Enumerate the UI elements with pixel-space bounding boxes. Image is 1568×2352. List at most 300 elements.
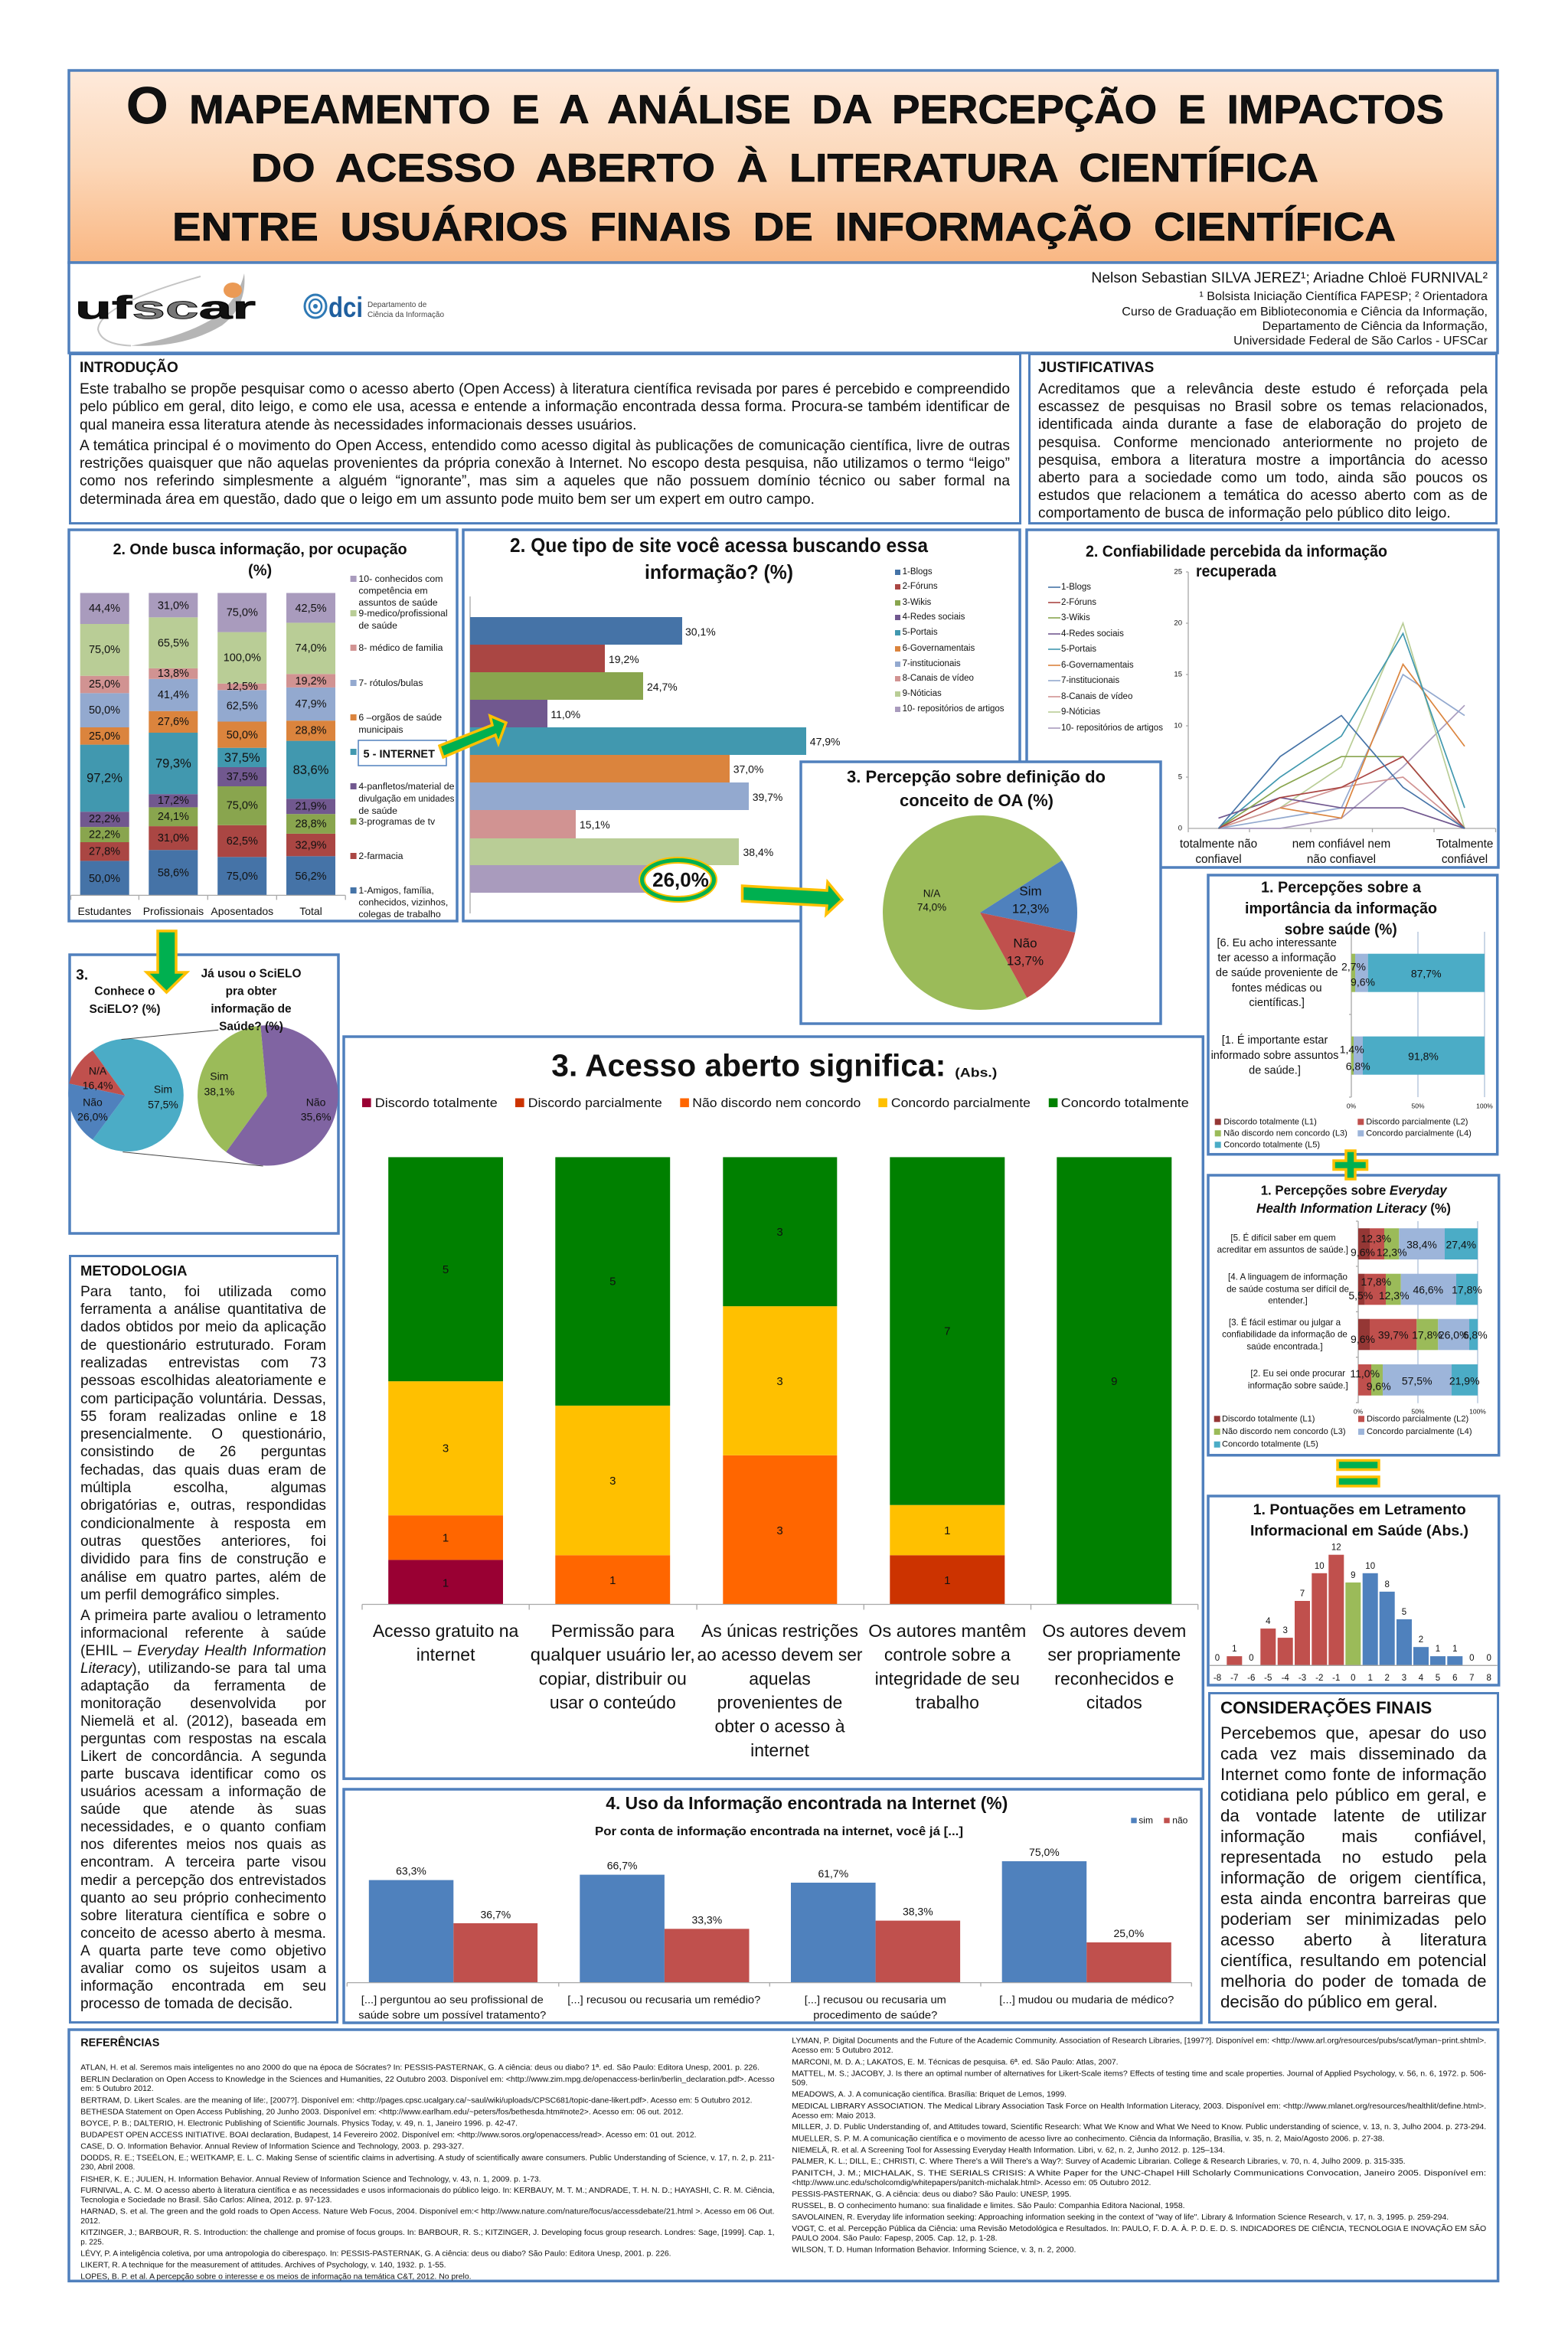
bar value labels: 12,5% [227, 681, 258, 693]
legend: Concordo parcialmente [891, 1095, 1031, 1109]
bar value labels: 37,5% [227, 771, 258, 783]
bar value labels: 28,8% [295, 818, 327, 830]
text block: introdução: determinada área em questão, dado que o leigo em um assunto pode muito bem ser um expert em outro campo. [80, 492, 815, 508]
bar value labels: 31,0% [158, 599, 189, 612]
references: right column [792, 2037, 1487, 2254]
references: left column: KITZINGER, J.; BARBOUR, R. S. Introduction: the challenge and promise of focus groups. In: BARBOUR, R. S.; KITZINGER, J. Developing focus group research. Londres: Sage, [1999]. Cap. 1, [81, 2229, 775, 2237]
text block: considerações finais: representada no estudo pela [1220, 1847, 1487, 1867]
legend: 10- repositórios de artigos [903, 704, 1004, 714]
legend: Concordo parcialmente (L4) [1367, 1427, 1472, 1436]
text block: metodologia: Likert de concordância. A segunda [80, 1749, 326, 1765]
bar value labels: 47,9% [295, 698, 327, 710]
stacked bar chart [1348, 1221, 1488, 1416]
logo: UFSCar [75, 273, 256, 346]
statement labels: acreditar em assuntos de saúde.] [1217, 1245, 1348, 1255]
text block: metodologia: conceito de acesso aberto à mesma. [80, 1926, 326, 1942]
histogram: -2 [1315, 1674, 1323, 1683]
pie chart: 74,0% [917, 902, 946, 913]
heading: já usou o SciELO [201, 967, 301, 1033]
text block: metodologia: processo de tomada de decisão. [80, 1996, 292, 2012]
bar value labels: 41,4% [158, 689, 189, 701]
line chart: 20 [1174, 619, 1182, 628]
text block: metodologia: Literacy), utilizando-se para tal uma [80, 1661, 326, 1677]
text block: metodologia: análise em quatro partes, além de [80, 1570, 326, 1586]
bar value labels: 50,0% [89, 873, 120, 885]
callout: 26,0% highlight [642, 861, 714, 899]
stacked bar chart: 12,3% [1379, 1289, 1410, 1302]
stacked bar chart: 1 [443, 1576, 449, 1589]
chart title [1086, 543, 1387, 580]
pie chart: Sim [1019, 884, 1042, 899]
authors [1091, 270, 1488, 348]
text block: metodologia: um perfil demográfico simples. [80, 1587, 279, 1603]
text block: metodologia: quanto ao seu próprio conhecimento [80, 1890, 326, 1906]
text block: considerações finais: decisão do público em geral. [1220, 1992, 1438, 2011]
pie: conhece o SciELO: 57,5% [148, 1098, 178, 1110]
panel: percepção sobre definição de OA [799, 760, 1162, 1025]
legend: municipais [358, 724, 403, 735]
category labels: [...] mudou ou mudaria de médico? [999, 1993, 1174, 2005]
legend: 6-Governamentais [1061, 661, 1134, 670]
text block: justificativas: escassez de pesquisas no Brasil sobre os temas relacionados, [1038, 399, 1488, 415]
legend: 7-institucionais [903, 659, 961, 668]
legend [1048, 583, 1163, 733]
chart title [113, 541, 407, 579]
panel: referências [67, 2028, 1499, 2283]
connector lines between pies [121, 1030, 263, 1166]
histogram: -7 [1230, 1674, 1238, 1683]
text block: metodologia: A quarta parte teve como objetivo [80, 1943, 326, 1959]
histogram: 3 [1402, 1674, 1406, 1683]
line chart: totalmente não [1180, 838, 1257, 851]
pie: já usou o SciELO: Não [305, 1096, 325, 1108]
authors: ¹ Bolsista Iniciação Científica FAPESP; ² Orientadora [1199, 289, 1488, 303]
stacked bar chart: 3 [776, 1225, 782, 1238]
category labels: [...] recusou ou recusaria um remédio? [567, 1993, 760, 2005]
callout: 5 - internet [358, 740, 446, 766]
legend: 3-Wikis [903, 598, 932, 607]
text block: considerações finais: da vontade latente de utilizar [1220, 1806, 1487, 1825]
horizontal bar chart: 19,2% [609, 653, 639, 665]
bar chart: 91,8% [1408, 1050, 1439, 1062]
line chart: não confiavel [1307, 853, 1376, 866]
chart title [847, 767, 1106, 810]
text block: considerações finais: poderiam ser minimizadas pelo [1220, 1909, 1487, 1929]
horizontal bar chart: 11,0% [550, 708, 580, 720]
legend: 2-Fóruns [903, 582, 938, 591]
horizontal bar chart: 37,0% [733, 763, 763, 776]
statement labels: [6. Eu acho interessante [1217, 937, 1337, 949]
bar value labels: 19,2% [295, 675, 327, 688]
panel: SciELO pies [68, 953, 340, 1235]
heading: 3.: 3. [76, 967, 88, 983]
category labels: aquelas [749, 1668, 810, 1688]
stacked bar chart: 50% [1411, 1408, 1425, 1416]
text block: considerações finais [1220, 1723, 1487, 2011]
bar value labels: 74,0% [295, 642, 327, 655]
line chart: 10 [1174, 721, 1182, 730]
text block: metodologia: múltipla escolha, algumas [80, 1480, 326, 1496]
stacked bar chart: 1 [609, 1573, 616, 1586]
legend: 4-Redes sociais [903, 612, 965, 622]
logo: DCI: dci [328, 292, 363, 323]
legend [1214, 1414, 1472, 1449]
bar value labels: 17,2% [158, 795, 189, 807]
legend: 8-Canais de vídeo [1061, 692, 1132, 701]
text block: metodologia: monitoração desenvolvida por [80, 1696, 326, 1712]
stacked bar chart: 12,3% [1361, 1232, 1391, 1244]
bar value labels: 83,6% [293, 763, 329, 777]
bar value labels: 50,0% [227, 729, 258, 741]
references: right column: PAULO 2004. São Paulo: Fapesp, 2005. Cap. 12, p. 1-28. [792, 2234, 998, 2243]
chart title: conceito de OA (%) [900, 791, 1054, 810]
category labels: As únicas restrições [701, 1620, 858, 1640]
legend: 4-Redes sociais [1061, 629, 1124, 639]
legend [895, 567, 1004, 714]
histogram: -6 [1247, 1674, 1255, 1683]
panel: que tipo de site [462, 528, 1021, 923]
authors: Nelson Sebastian SILVA JEREZ¹; Ariadne Chloë FURNIVAL² [1091, 270, 1488, 286]
grouped bar chart [347, 1845, 1191, 1986]
legend [362, 1095, 1188, 1109]
bar chart: 87,7% [1411, 967, 1442, 979]
statement labels: informado sobre assuntos [1211, 1050, 1338, 1062]
heading: conhece o SciELO: SciELO? (%) [89, 1003, 160, 1016]
bar value labels: 65,5% [158, 637, 189, 649]
histogram: 4 [1266, 1617, 1271, 1626]
category labels [373, 1620, 1186, 1759]
chart title: 2. Confiabilidade percebida da informação [1086, 543, 1387, 560]
stacked bar chart: 3 [776, 1524, 782, 1537]
category labels: internet [750, 1740, 809, 1759]
bar value labels: 56,2% [295, 871, 327, 883]
text block: metodologia: encontram. A terceira parte visou [80, 1854, 326, 1870]
stacked bar chart: 3 [776, 1375, 782, 1387]
heading: conhece o SciELO [89, 985, 160, 1016]
references: left column: 2012. [81, 2217, 100, 2226]
references: left column: Tecnologia e Sociedade no Brasil. São Carlos: Alínea, 2012. p. 97-123. [81, 2196, 332, 2204]
text block: metodologia: consistindo de 26 perguntas [80, 1444, 326, 1460]
legend: 9-Nóticias [1061, 707, 1100, 717]
stacked bar chart: 17,8% [1452, 1284, 1482, 1296]
text block: considerações finais: Percebemos que, apesar do uso [1220, 1723, 1487, 1743]
text block: metodologia: usuários acessam a informação de [80, 1784, 326, 1800]
references: right column: MARCONI, M. D. A.; LAKATOS, E. M. Técnicas de pesquisa. 6ª. ed. São Paulo: Atlas, 2007. [792, 2058, 1119, 2066]
text block: considerações finais: científica, resultando em potencial [1220, 1951, 1487, 1970]
panel: pontuações em letramento informacional [1207, 1494, 1501, 1687]
legend: 5-Portais [903, 628, 938, 637]
legend: Discordo parcialmente (L2) [1367, 1414, 1468, 1423]
category labels: controle sobre a [884, 1645, 1011, 1664]
heading: referências: REFERÊNCIAS [81, 2035, 160, 2049]
references: left column [81, 2063, 775, 2281]
category labels: integridade de seu [874, 1668, 1020, 1688]
bar chart: 1,4% [1340, 1043, 1364, 1055]
histogram: 8 [1486, 1674, 1491, 1683]
histogram: 0 [1469, 1654, 1475, 1663]
panel: metodologia [69, 1255, 338, 2024]
chart title: 3. Percepção sobre definição do [847, 767, 1106, 786]
horizontal bar chart: 15,1% [580, 818, 610, 831]
heading: metodologia: METODOLOGIA [80, 1263, 187, 1279]
legend: Não discordo nem concordo [692, 1095, 861, 1109]
callout: 26,0% highlight: 26,0% [652, 868, 709, 891]
references: right column: MILLER, J. D. Public Understanding of, and Attitudes toward, Scientific Research: What We Know and What We Need to Know. Public understanding of science, v. 13, n. 3, Julho 2004. p. 273-294. [792, 2123, 1487, 2132]
references: left column: DODDS, R. E.; TSEËLON, E.; WEITKAMP, E. L. C. Making Sense of scientific claims in advertising. A study of scientifically aware consumers. Public Understanding of Science, v. 17, n. 2, p. 211- [81, 2153, 775, 2162]
text block: metodologia: 55 foram realizadas online e 18 [80, 1409, 326, 1425]
references: left column: BERTRAM, D. Likert Scales. are the meaning of life:, [2007?]. Disponível em: <http://pages.cpsc.ucalgary.ca/~saul/wiki/uploads/CPSC681/topic-dane-likert.pdf>. Acesso em: 5 Outubro 2012. [81, 2096, 753, 2105]
legend: Concordo totalmente (L5) [1222, 1440, 1318, 1449]
text block: metodologia: avaliar como os sujeitos usam a [80, 1961, 326, 1977]
stacked bar chart: 1 [443, 1531, 449, 1544]
text block: metodologia: medir a percepção dos entrevistados [80, 1873, 326, 1889]
histogram: 4 [1419, 1674, 1424, 1683]
references: left column: BOYCE, P. B.; DALTERIO, H. Electronic Publishing of Scientific Journals. Physics Today, v. 49, n. 1, Janeiro 1996. p. 42-47. [81, 2119, 518, 2128]
text block: considerações finais: cotidiana pelo público em geral, e [1220, 1785, 1487, 1805]
references: left column: 230, Abril 2008. [81, 2163, 136, 2171]
chart title [1245, 880, 1437, 939]
category labels: Os autores devem [1042, 1620, 1186, 1640]
legend: 2-farmacia [358, 851, 403, 861]
statement labels: [2. Eu sei onde procurar [1250, 1369, 1345, 1379]
logo: UFSCar: uf sc ar [75, 289, 256, 325]
title line 1: O MAPEAMENTO E A ANÁLISE DA PERCEPÇÃO E IMPACTOS [126, 77, 1444, 135]
histogram: 5 [1402, 1608, 1406, 1617]
histogram: 1 [1367, 1674, 1373, 1683]
x axis labels: Estudantes [77, 905, 132, 917]
legend: 1-Blogs [1061, 583, 1091, 592]
line chart: 25 [1174, 568, 1182, 576]
stacked bar chart: 0% [1354, 1408, 1364, 1416]
histogram: 10 [1365, 1562, 1375, 1571]
legend [351, 573, 455, 920]
bar value labels: 44,4% [89, 603, 120, 615]
line chart: confiavel [1195, 853, 1242, 866]
stacked bar chart: 27,4% [1446, 1239, 1476, 1251]
text block: metodologia: condicionalmente à resposta em [80, 1516, 326, 1532]
histogram: 1 [1232, 1645, 1237, 1654]
stacked bar chart: 17,8% [1361, 1276, 1391, 1288]
bar chart: 2,7% [1341, 961, 1366, 973]
references: left column: CASE, D. O. Information Behavior. Annual Review of Information Science and Technology, 2003. p. 293-327. [81, 2142, 465, 2151]
chart title: recuperada [1196, 563, 1276, 580]
text block: metodologia: informacional referente à saúde [80, 1625, 326, 1642]
category labels: obter o acesso à [714, 1716, 844, 1736]
chart title: Health Information Literacy (%) [1256, 1200, 1451, 1216]
bar value labels: 31,0% [158, 832, 189, 844]
stacked bar chart: 9,6% [1367, 1380, 1391, 1393]
text block: considerações finais: acesso aberto à literatura [1220, 1930, 1487, 1949]
references: left column: em: 5 Outubro 2012. [81, 2085, 154, 2093]
references: left column: p. 225. [81, 2238, 104, 2246]
legend: Discordo totalmente (L1) [1223, 1117, 1317, 1126]
panel: percepções sobre everyday health information literacy [1207, 1174, 1501, 1456]
references: right column: Acesso em: 5 Outubro 2012. [792, 2047, 893, 2055]
category labels: citados [1086, 1692, 1142, 1712]
icon: equals sign [1336, 1459, 1380, 1488]
category labels: copiar, distribuir ou [538, 1668, 687, 1688]
references: right column: PESSIS-PASTERNAK, G. A ciência: deus ou diabo? São Paulo: UNESP, 1995. [792, 2190, 1072, 2199]
pie: conhece o SciELO: Sim [154, 1083, 172, 1095]
grouped bar chart: 25,0% [1113, 1926, 1144, 1939]
legend: colegas de trabalho [358, 909, 441, 920]
pie chart [883, 815, 1077, 1010]
authors: Curso de Graduação em Biblioteconomia e Ciência da Informação, [1122, 305, 1488, 318]
legend: 7- rótulos/bulas [358, 678, 423, 688]
chart title: 3. Acesso aberto significa: [551, 1047, 946, 1083]
panel: justificativas [1028, 353, 1498, 524]
text block: considerações finais: Internet como fonte de informação [1220, 1765, 1487, 1784]
title line 3: ENTRE USUÁRIOS FINAIS DE INFORMAÇÃO CIENTÍFICA [172, 204, 1396, 250]
panel: onde busca informação por ocupação [67, 528, 459, 923]
histogram: 9 [1351, 1571, 1356, 1580]
text block: justificativas: identificada ainda durante a fase de elaboração do projeto de [1038, 416, 1488, 433]
heading: introdução: INTRODUÇÃO [80, 360, 178, 376]
statement labels: de saúde proveniente de [1216, 967, 1338, 979]
horizontal bar chart [470, 596, 841, 913]
stacked bar chart: 9,6% [1351, 1246, 1375, 1258]
text block: metodologia: dividido para fins de construção e [80, 1551, 326, 1567]
stacked bar chart: 39,7% [1378, 1329, 1409, 1341]
logo: DCI: Departamento de [368, 301, 427, 309]
histogram: 0 [1351, 1674, 1356, 1683]
histogram: 3 [1282, 1626, 1288, 1635]
text block: introdução: pelo público em geral, dito leigo, e como ele usa, acessa e entende a informação encontrada dessa forma. Procura-se também identificar de [80, 399, 1010, 415]
legend: 3-Wikis [1061, 613, 1090, 622]
category labels: [...] perguntou ao seu profissional de [361, 1993, 544, 2005]
statement labels: científicas.] [1249, 997, 1305, 1009]
references: left column: FURNIVAL, A. C. M. O acesso aberto à literatura científica e as necessidades e usos informacionais do público leigo. In: KERBAUY, M. T. M.; ANDRADE, T. H. N. D.; HAYASHI, C. R. M. Ciência, [81, 2187, 775, 2195]
line chart: 5 [1178, 773, 1182, 781]
authors: Departamento de Ciência da Informação, [1263, 319, 1488, 333]
text block: metodologia: ferramenta a análise quantitativa de [80, 1302, 326, 1318]
histogram: -3 [1298, 1674, 1306, 1683]
stacked bar chart: 38,4% [1406, 1239, 1437, 1251]
text block: introdução: como nos referindo simplesmente a alguém “ignorante”, mas sim a aqueles que não possuem domínio técnico ou saber formal na [80, 473, 1010, 489]
line chart: Totalmente [1436, 838, 1493, 851]
category labels: provenientes de [717, 1692, 842, 1712]
heading: conhece o SciELO: Conhece o [94, 985, 155, 998]
bar value labels: 37,5% [224, 751, 260, 765]
histogram: 0 [1486, 1654, 1491, 1663]
references: left column: BUDAPEST OPEN ACCESS INITIATIVE. BOAI declaration, Budapest, 14 Fevereiro 2002. Disponível em: <http://www.soros.org/openaccess/read>. Acesso em: 01 out. 2012. [81, 2131, 697, 2139]
stacked bar chart: 9 [1111, 1375, 1117, 1387]
chart title: 2. Onde busca informação, por ocupação [113, 541, 407, 558]
text block: metodologia: de questionário estruturado. Foram [80, 1338, 326, 1354]
text block: metodologia: outras questões anteriores, foi [80, 1534, 326, 1550]
references: right column: MATTEL, M. S.; JACOBY, J. Is there an optimal number of alternatives for Likert-Scale items? Effects of testing time and scale properties. Journal of Applied Psychology, v. 56, n. 6, 1972. p. 506- [792, 2069, 1487, 2078]
panel: confiabilidade percebida [1025, 528, 1500, 869]
text block: justificativas: aberto para a sociedade como um todo, ainda são poucos os [1038, 470, 1488, 486]
histogram: 6 [1452, 1674, 1458, 1683]
references: right column: SAVOLAINEN, R. Everyday life information seeking: Approaching information seeking in the context of "way of life". Library & Information Science Research, v. 17, n. 3, 1995. p. 259-294. [792, 2213, 1449, 2222]
legend: 4-panfletos/material de [358, 781, 455, 792]
category labels: Acesso gratuito na [373, 1620, 518, 1640]
panel: introdução [69, 353, 1021, 524]
references: left column: FISHER, K. E.; JULIEN, H. Information Behavior. Annual Review of Information Science and Technology, v. 43, n. 1, 2009. p. 1-73. [81, 2175, 541, 2184]
category labels: [...] recusou ou recusaria um [804, 1993, 946, 2005]
panel: title banner [67, 69, 1499, 264]
grouped bar chart: 36,7% [480, 1908, 511, 1920]
grouped bar chart: 61,7% [818, 1867, 848, 1879]
bar value labels: 22,2% [89, 813, 120, 825]
histogram: 2 [1384, 1674, 1390, 1683]
references: left column: BETHESDA Statement on Open Access Publishing, 20 Junho 2003. Disponível em: <http://www.earlham.edu/~peters/fos/bethesda.htm#note2>. Acesso em: 06 out. 2012. [81, 2108, 684, 2116]
statement labels: saúde encontrada.] [1246, 1341, 1323, 1351]
bar value labels: 62,5% [227, 701, 258, 713]
text block: considerações finais: esta ainda encontra barreiras que [1220, 1889, 1487, 1908]
statement labels: de saúde costuma ser difícil de [1227, 1284, 1349, 1294]
text block: metodologia: sobre literatura científica e sobre o [80, 1908, 326, 1924]
bar value labels: 58,6% [158, 867, 189, 880]
panel: considerações finais [1208, 1692, 1499, 2024]
legend: de saúde [358, 805, 397, 816]
pie chart: N/A [923, 888, 940, 899]
bar value labels: 97,2% [87, 772, 122, 786]
legend: 3-programas de tv [358, 816, 436, 827]
bar value labels: 75,0% [227, 800, 258, 812]
panel: percepções sobre importância da informação [1207, 874, 1499, 1156]
text block: metodologia: informação encontrada em seu [80, 1978, 326, 1994]
text block: metodologia: Niemelä et al. (2012), baseada em [80, 1713, 326, 1730]
text block: introdução: restrições quaisquer que não aquelas provenientes da própria conexão à Internet. No escopo desta pesquisa, não utilizamos o termo “leigo” [80, 456, 1010, 472]
references: right column: MEADOWS, A. J. A comunicação científica. Brasília: Briquet de Lemos, 1999. [792, 2090, 1067, 2099]
category labels: trabalho [915, 1692, 979, 1712]
histogram: 0 [1215, 1654, 1220, 1663]
chart title: informação? (%) [645, 560, 793, 583]
panel: uso da informação na internet [342, 1788, 1203, 2024]
icon: plus sign [1332, 1149, 1369, 1181]
legend: divulgação em unidades [358, 793, 454, 804]
references: right column: RUSSEL, B. O conhecimento humano: sua finalidade e limites. São Paulo: Companhia Editora Nacional, 1958. [792, 2202, 1185, 2210]
text block: metodologia: saúde que atende às suas [80, 1802, 326, 1818]
stacked bar chart: 9,6% [1351, 1333, 1375, 1345]
statement labels: informação sobre saúde.] [1248, 1380, 1348, 1390]
chart title: (%) [248, 562, 272, 579]
text block: metodologia: Para tanto, foi utilizada como [80, 1284, 326, 1300]
bar chart: 6,8% [1346, 1060, 1370, 1072]
text block: justificativas [1038, 381, 1488, 521]
pie: conhece o SciELO: 16,4% [82, 1079, 113, 1091]
legend: Discordo parcialmente [528, 1095, 662, 1109]
category labels: ser propriamente [1047, 1645, 1181, 1664]
legend: 7-institucionais [1061, 676, 1119, 685]
category labels: internet [416, 1645, 475, 1664]
x axis labels: Total [299, 905, 322, 917]
bar chart: 0% [1347, 1102, 1357, 1110]
stacked bar chart: 57,5% [1402, 1375, 1432, 1387]
chart title [1256, 1183, 1451, 1216]
heading: já usou o SciELO: Saúde? (%) [219, 1020, 283, 1033]
grouped bar chart: 66,7% [606, 1859, 637, 1871]
bar value labels: 25,0% [89, 730, 120, 743]
stacked bar chart: 1 [944, 1573, 950, 1586]
legend: Não discordo nem concordo (L3) [1222, 1427, 1346, 1436]
stacked bar chart: 1 [944, 1524, 950, 1537]
histogram: 12 [1331, 1544, 1341, 1553]
bar value labels: 13,8% [158, 668, 189, 680]
text block: justificativas: pesquisa. Conforme mencionado anteriormente no projeto de [1038, 435, 1488, 451]
category labels [358, 1993, 1174, 2020]
bar value labels: 50,0% [89, 704, 120, 717]
category labels: reconhecidos e [1054, 1668, 1174, 1688]
stacked bar chart: 5,5% [1348, 1289, 1373, 1302]
references: right column: VOGT, C. et al. Percepção Pública da Ciência: uma Revisão Metodológica e Resultados. In: PAULO, F. D. A. À. P. D. E. D. S. INDICADORES DE CIÊNCIA, TECNOLOGIA E INOVAÇÃO EM SÃO [792, 2223, 1487, 2233]
text block: metodologia: dados obtidos por meio da aplicação [80, 1319, 326, 1335]
text block: metodologia: (EHIL – Everyday Health Information [80, 1643, 326, 1659]
chart title: 4. Uso da Informação encontrada na Internet (%) [606, 1793, 1008, 1813]
stacked bar chart: 11,0% [1350, 1367, 1380, 1380]
